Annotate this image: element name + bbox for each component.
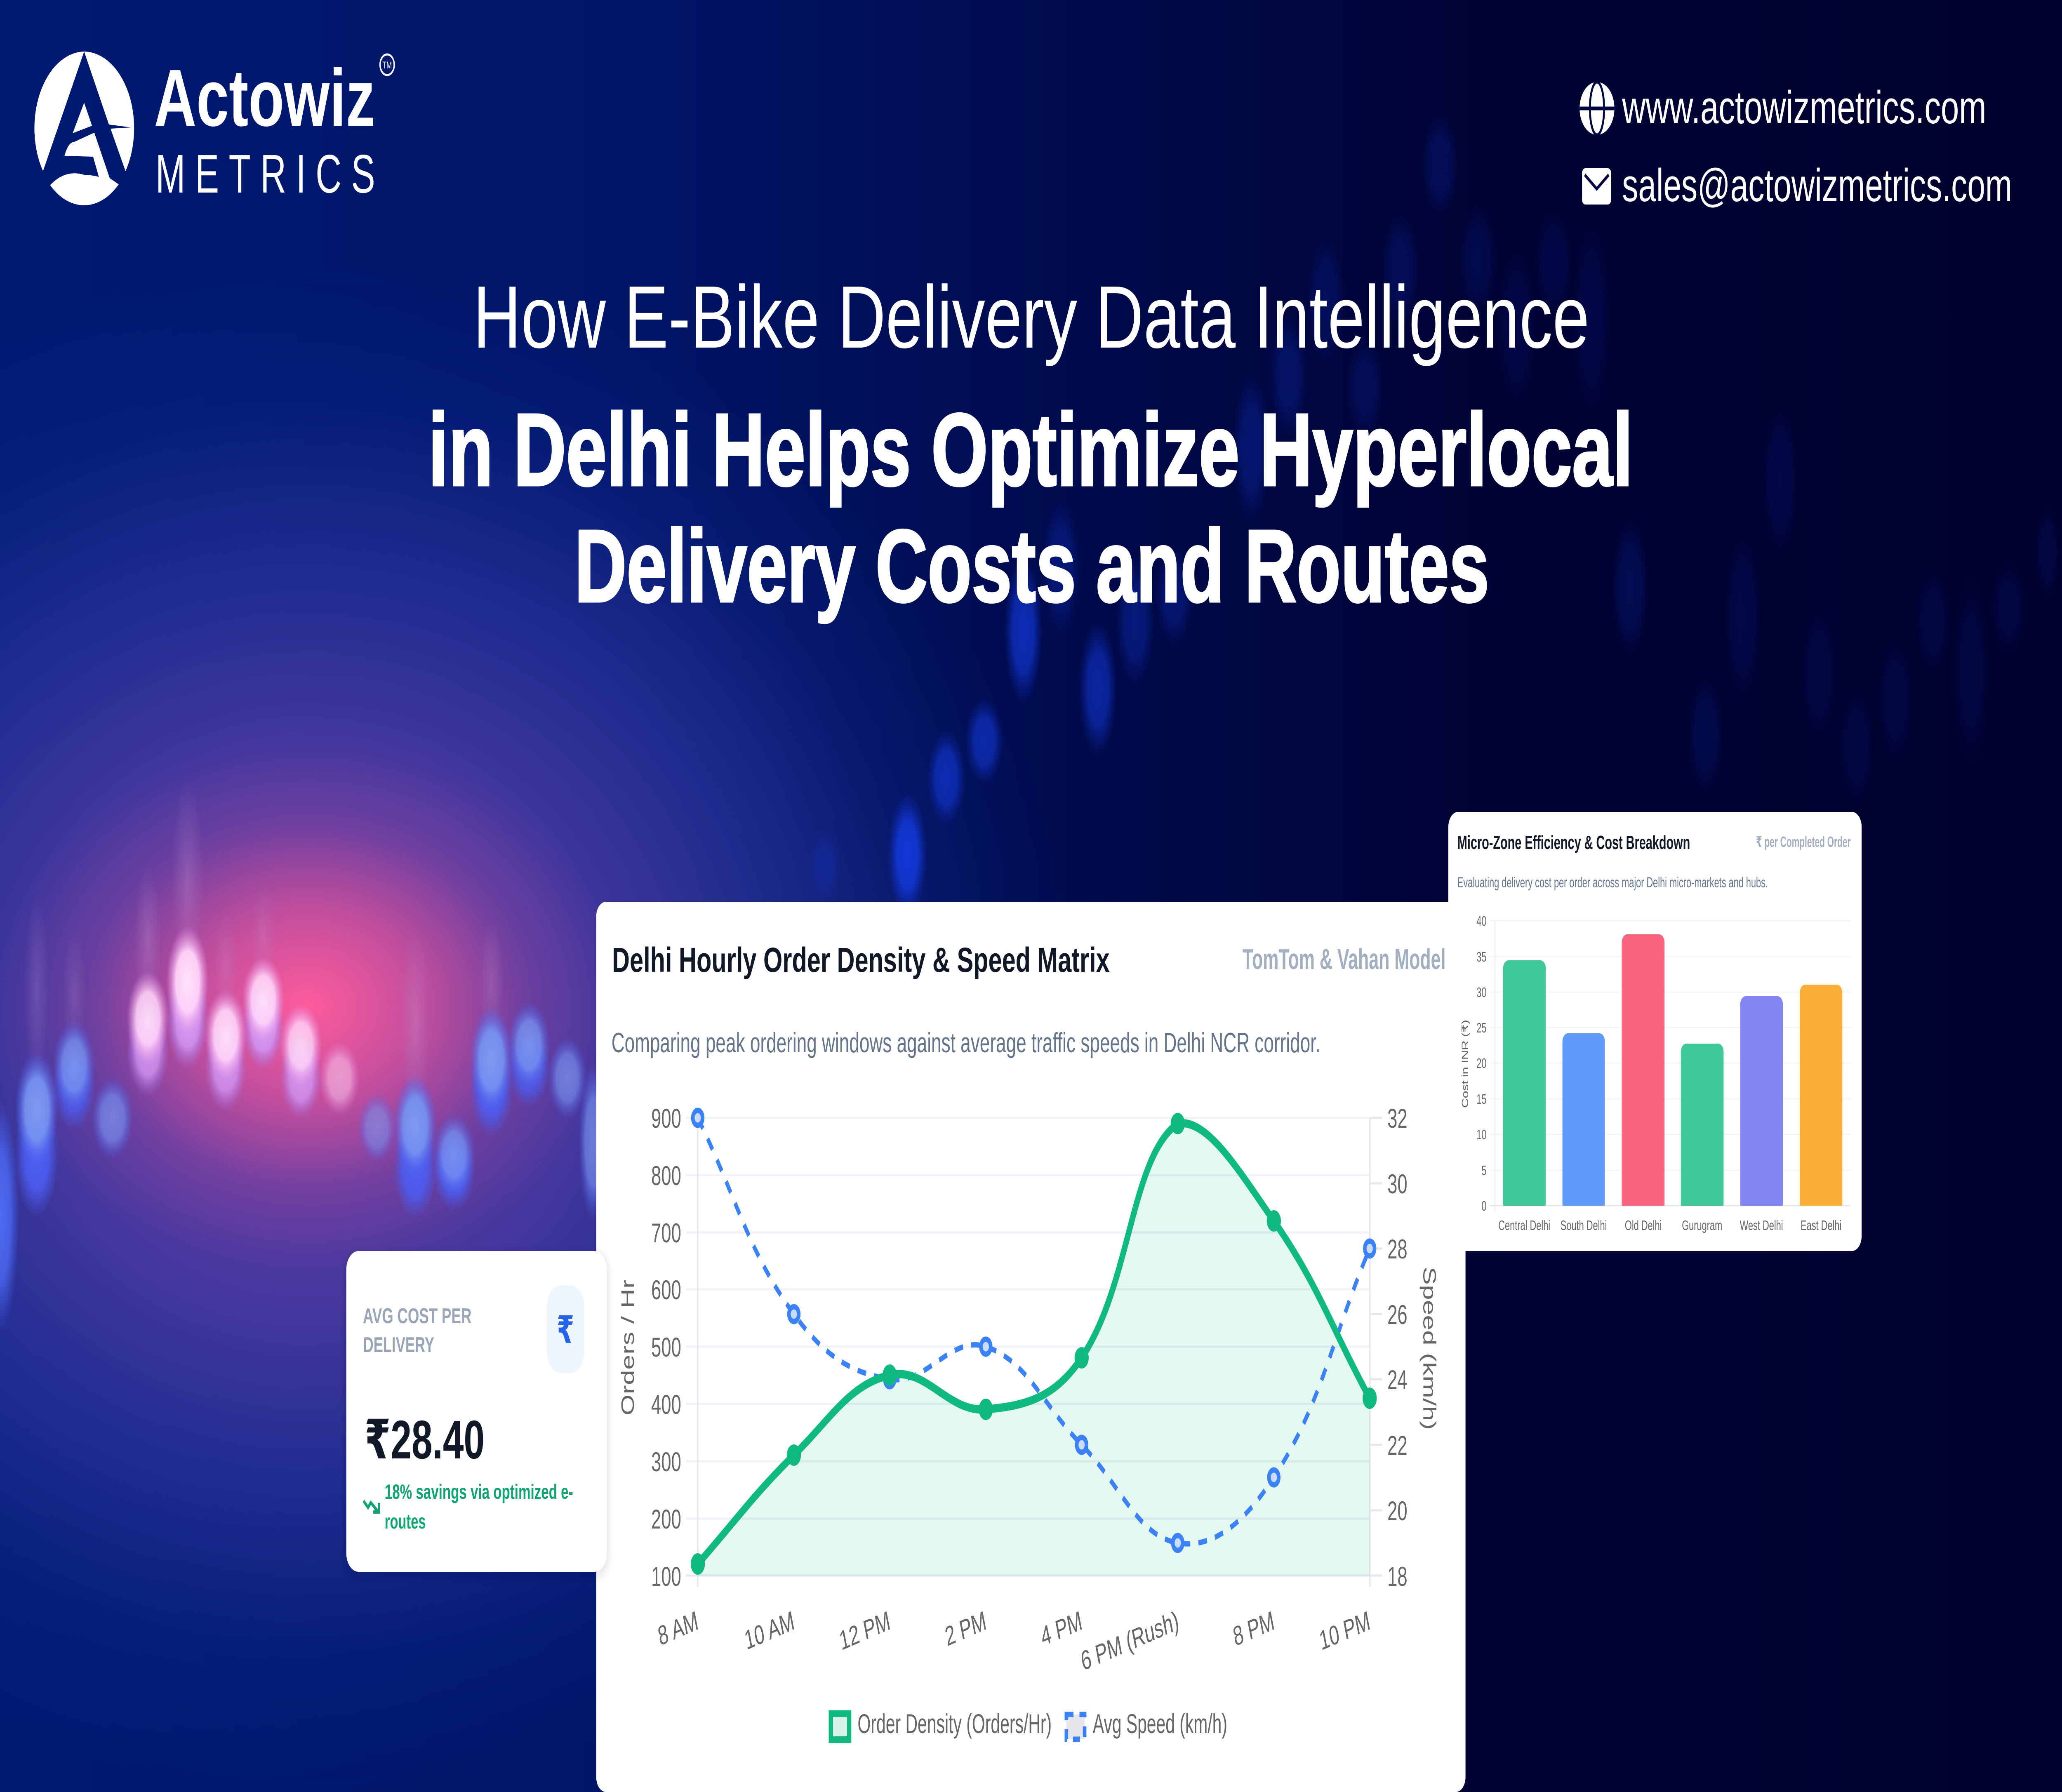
left axis labels: 300 [651, 1446, 681, 1477]
panel: hourly order density and speed matrix [596, 902, 1466, 1792]
x axis labels: 4 PM [1038, 1605, 1084, 1652]
bar chart [1460, 913, 1851, 1233]
y axis labels: 40 [1476, 913, 1486, 929]
icon: envelope [1582, 168, 1611, 205]
y axis labels: 5 [1481, 1163, 1486, 1178]
subtitle: Comparing peak ordering windows against average traffic speeds in Delhi NCR corridor. [612, 1028, 1321, 1058]
x axis labels: 8 AM [656, 1605, 701, 1651]
points: order density [691, 1113, 1377, 1575]
logo: Actowiz Metrics [34, 52, 394, 205]
background candlesticks [0, 113, 2061, 1332]
x axis labels: South Delhi [1561, 1218, 1607, 1233]
line: order density [698, 1123, 1370, 1564]
x axis labels: 10 AM [742, 1605, 797, 1656]
legend [831, 1708, 1227, 1740]
left axis labels: 500 [651, 1332, 681, 1362]
x axis labels [1498, 1218, 1841, 1233]
right axis labels: 30 [1387, 1169, 1408, 1199]
x axis labels: West Delhi [1740, 1218, 1783, 1233]
left axis labels: 700 [651, 1218, 681, 1248]
y axis labels: 15 [1476, 1091, 1486, 1107]
left axis labels: 100 [651, 1561, 681, 1592]
panel: avg cost per delivery KPI [340, 1245, 613, 1584]
points: avg speed [693, 1110, 1375, 1550]
KPI savings note: routes [385, 1510, 426, 1533]
bars [1503, 934, 1842, 1206]
x axis labels: 2 PM [943, 1605, 989, 1652]
x axis labels: 12 PM [837, 1605, 892, 1656]
legend: Avg Speed (km/h) [1093, 1708, 1227, 1739]
icon: rupee badge [547, 1285, 584, 1373]
x axis labels: 8 PM [1231, 1605, 1276, 1652]
logo: Actowiz Metrics: TM [382, 60, 392, 71]
right axis labels: 26 [1387, 1299, 1408, 1330]
left axis labels: 400 [651, 1389, 681, 1420]
subtitle: Evaluating delivery cost per order across major Delhi micro-markets and hubs. [1457, 875, 1768, 891]
heading: micro-zone: Micro-Zone Efficiency & Cost Breakdown [1457, 833, 1690, 854]
y axis labels: 10 [1476, 1127, 1486, 1142]
KPI label: DELIVERY [363, 1333, 434, 1357]
KPI label: AVG COST PER [363, 1304, 471, 1328]
right axis labels: 22 [1387, 1430, 1408, 1460]
x axis labels: 6 PM (Rush) [1078, 1605, 1181, 1677]
right axis labels: 28 [1387, 1234, 1408, 1264]
x axis labels: Gurugram [1682, 1218, 1722, 1233]
KPI savings note: 18% savings via optimized e- [385, 1480, 573, 1503]
axis title: speed: Speed (km/h) [1419, 1267, 1440, 1430]
source note: TomTom & Vahan Model [1243, 943, 1445, 975]
icon: trend down [363, 1501, 379, 1512]
unit note: ₹ per Completed Order [1756, 834, 1851, 850]
contact: website: www.actowizmetrics.com [1622, 82, 1986, 134]
x axis labels: East Delhi [1801, 1218, 1841, 1233]
title: Delivery Costs and Routes [574, 508, 1489, 623]
icon: logo A mark [34, 52, 134, 205]
y axis labels: 20 [1476, 1056, 1486, 1071]
heading: hourly matrix: Delhi Hourly Order Density & Speed Matrix [612, 941, 1110, 980]
line chart [617, 1103, 1440, 1740]
icon: globe [1579, 82, 1615, 135]
y axis labels: 25 [1476, 1020, 1486, 1035]
y axis labels: 0 [1481, 1198, 1486, 1213]
left axis labels [651, 1103, 681, 1592]
legend: Order Density (Orders/Hr) [857, 1708, 1052, 1739]
line: avg speed [698, 1118, 1370, 1544]
x axis labels: Old Delhi [1625, 1218, 1662, 1233]
KPI value: ₹28.40 [365, 1409, 485, 1470]
area: order density fill [698, 1123, 1370, 1576]
logo: Actowiz Metrics: Actowiz [154, 53, 375, 143]
logo: Actowiz Metrics: METRICS [155, 143, 375, 204]
x axis labels [656, 1605, 1372, 1677]
left axis labels: 200 [651, 1504, 681, 1534]
left axis labels: 600 [651, 1275, 681, 1305]
right axis labels: 20 [1387, 1496, 1408, 1526]
x axis labels: Central Delhi [1498, 1218, 1550, 1233]
right axis labels: 32 [1387, 1103, 1408, 1134]
KPI label [363, 1304, 471, 1357]
panel: micro-zone efficiency and cost breakdown [1448, 812, 1862, 1251]
axis title: cost in INR: Cost in INR (₹) [1460, 1020, 1470, 1108]
KPI savings note [385, 1480, 573, 1533]
y axis labels [1476, 913, 1486, 1213]
left axis labels: 800 [651, 1160, 681, 1191]
right axis labels: 18 [1387, 1561, 1408, 1592]
y axis labels: 30 [1476, 985, 1486, 1000]
right axis labels: 24 [1387, 1364, 1408, 1395]
y axis labels: 35 [1476, 949, 1486, 964]
title: in Delhi Helps Optimize Hyperlocal [428, 392, 1633, 507]
left axis labels: 900 [651, 1103, 681, 1134]
x axis labels: 10 PM [1317, 1605, 1372, 1656]
icon: rupee badge: ₹ [557, 1308, 574, 1351]
title [428, 267, 1633, 623]
axis title: orders per hour: Orders / Hr [617, 1279, 638, 1416]
title: How E-Bike Delivery Data Intelligence [473, 267, 1589, 367]
contact: email: sales@actowizmetrics.com [1622, 160, 2012, 212]
right axis labels [1387, 1103, 1408, 1592]
